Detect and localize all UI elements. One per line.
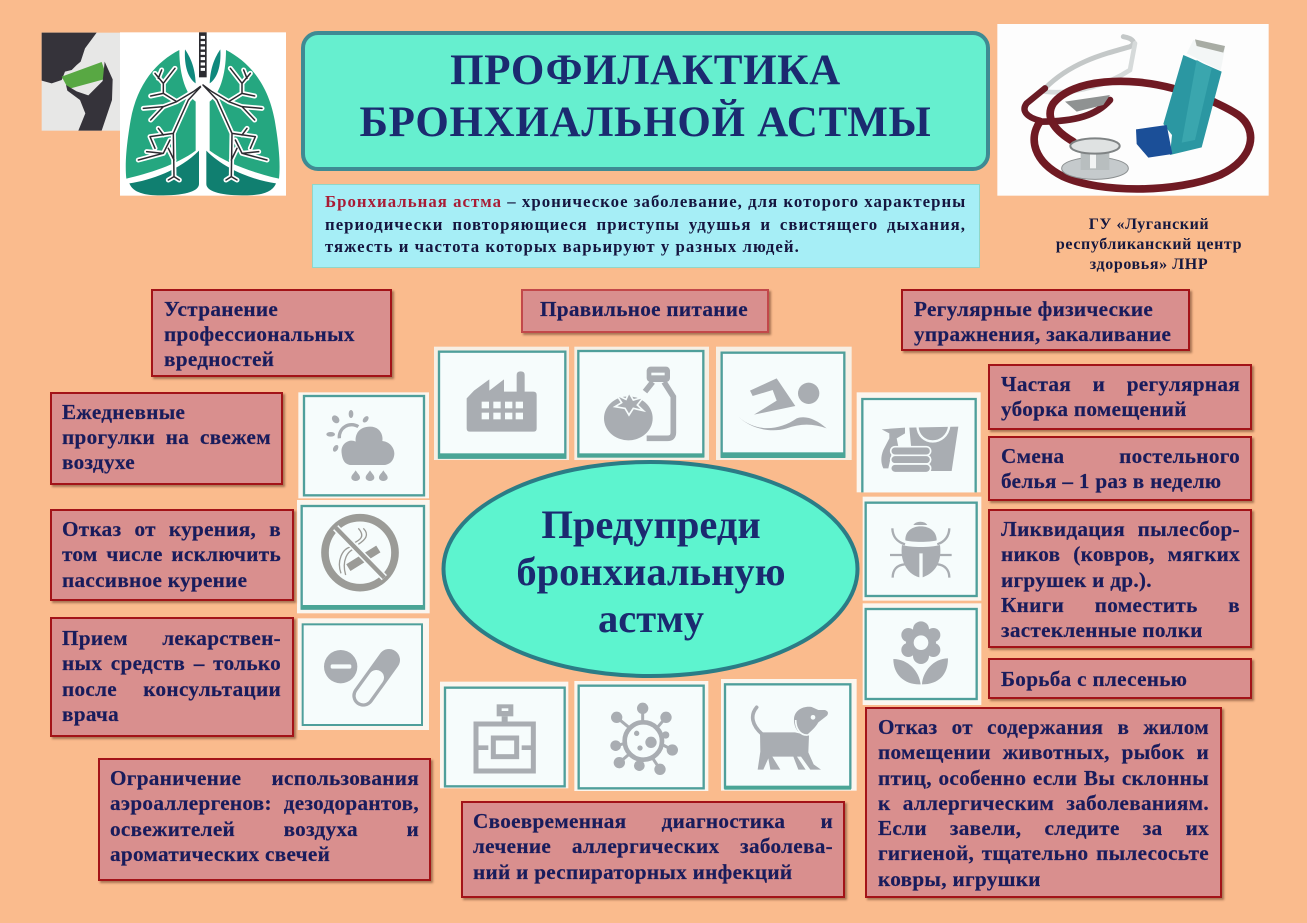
icon tile: flower	[863, 603, 981, 705]
panel: fight mould	[988, 658, 1252, 699]
panel: change bed linen: Смена постельного	[1001, 444, 1240, 468]
central ellipse: Предупреди бронхиальную астму	[444, 462, 858, 676]
panel: remove dust collectors	[988, 509, 1252, 648]
panel: physical exercise: Регулярные физические	[914, 297, 1153, 321]
central ellipse: Предупреди бронхиальную астму: астму	[598, 596, 704, 641]
panel: occupational hazards: Устранение	[164, 296, 278, 320]
panel: medication: врача	[62, 702, 119, 726]
photo: stethoscope and inhaler	[997, 24, 1269, 196]
icon tile: virus	[574, 681, 708, 791]
title	[301, 31, 990, 171]
panel: remove dust collectors: Книги поместить в	[1001, 593, 1240, 617]
panel: quit smoking: Отказ от курения, в	[62, 517, 281, 541]
panel: occupational hazards: вредностей	[164, 347, 274, 371]
icon tile: aerosol bottle	[440, 682, 568, 788]
panel: occupational hazards	[151, 289, 392, 377]
icon tile: no smoking	[297, 500, 430, 613]
panel: aeroallergens: ароматических свечей	[110, 842, 330, 866]
panel: occupational hazards: профессиональных	[164, 322, 355, 346]
icon tile: swimmer	[716, 347, 852, 460]
panel: fight mould: Борьба с плесенью	[1001, 667, 1187, 691]
panel: quit smoking	[50, 509, 294, 601]
central ellipse: Предупреди бронхиальную астму: Предупреди	[541, 502, 761, 547]
icon tile: factory	[434, 347, 569, 460]
panel: daily walks: Ежедневные воздухе	[62, 400, 185, 474]
title: БРОНХИАЛЬНОЙ АСТМЫ	[360, 98, 931, 146]
panel: proper nutrition	[521, 289, 769, 333]
photo: silhouette using an inhaler	[42, 33, 122, 131]
panel: physical exercise: упражнения, закаливание	[914, 322, 1171, 346]
definition text block: Бронхиальная астма – хроническое заболевание, для которого характерны	[325, 192, 966, 211]
panel: timely diagnosis: Своевременная диагностика и	[473, 809, 833, 833]
central ellipse: Предупреди бронхиальную астму: бронхиальную	[516, 549, 786, 594]
panel: remove dust collectors: игрушек и др.). застекленные полки	[1001, 568, 1203, 642]
panel: no pets: Если завели, следите за их	[878, 816, 1209, 840]
panel: no pets: ковры, игрушки	[878, 867, 1041, 891]
panel: timely diagnosis	[461, 801, 845, 898]
panel: no pets: помещении животных, рыбок и	[878, 740, 1209, 764]
title: ПРОФИЛАКТИКА	[450, 47, 841, 94]
definition text block: периодически повторяющиеся приступы удушья и свистящего дыхания,	[325, 215, 966, 234]
organisation credit: здоровья» ЛНР	[1090, 256, 1208, 273]
organisation credit: республиканский центр	[1056, 236, 1242, 253]
panel: remove dust collectors: ников (ковров, мягких	[1001, 542, 1240, 566]
panel: physical exercise	[901, 289, 1190, 351]
icon tile: beetle	[863, 497, 981, 601]
panel: medication: после консультации	[62, 677, 281, 701]
panel: timely diagnosis: ний и респираторных инфекций	[473, 860, 792, 884]
icon tile: dog	[721, 679, 857, 791]
panel: aeroallergens: освежителей воздуха и	[110, 817, 419, 841]
panel: regular cleaning: уборка помещений	[1001, 397, 1187, 421]
panel: no pets: Отказ от содержания в жилом	[878, 715, 1209, 739]
panel: no pets: к аллергическим заболеваниям.	[878, 791, 1209, 815]
panel: no pets: гигиеной, тщательно пылесосьте	[878, 841, 1209, 865]
panel: remove dust collectors: Ликвидация пылесбор-	[1001, 517, 1240, 541]
panel: daily walks	[50, 392, 283, 485]
definition text block	[312, 184, 980, 268]
icon tile: food	[574, 347, 709, 460]
panel: medication: Прием лекарствен-	[62, 626, 281, 650]
panel: quit smoking: том числе исключить	[62, 542, 281, 566]
panel: regular cleaning	[988, 364, 1252, 430]
panel: quit smoking: пассивное курение	[62, 568, 247, 592]
icon tile: weather	[298, 392, 429, 498]
organisation credit	[1056, 216, 1242, 273]
panel: proper nutrition: Правильное питание	[540, 297, 748, 321]
panel: change bed linen	[988, 436, 1252, 501]
panel: medication	[50, 617, 294, 737]
definition text block: тяжесть и частота которых варьируют у разных людей.	[325, 237, 800, 256]
panel: medication: ных средств – только	[62, 651, 281, 675]
panel: regular cleaning: Частая и регулярная	[1001, 372, 1240, 396]
photo: lungs illustration	[120, 32, 286, 196]
panel: no pets: птиц, особенно если Вы склонны	[878, 766, 1209, 790]
panel: aeroallergens: Ограничение использования	[110, 766, 419, 790]
panel: aeroallergens: аэроаллергенов: дезодорантов,	[110, 791, 419, 815]
panel: change bed linen: белья – 1 раз в неделю	[1001, 469, 1221, 493]
organisation credit: ГУ «Луганский	[1089, 216, 1209, 233]
panel: daily walks: прогулки на свежем	[62, 425, 271, 449]
panel: timely diagnosis: лечение аллергических заболева-	[473, 834, 833, 858]
panel: no pets	[865, 707, 1222, 898]
panel: aeroallergens	[98, 758, 431, 881]
icon tile: pills	[298, 618, 429, 730]
icon tile: cleaning supplies	[857, 392, 981, 492]
